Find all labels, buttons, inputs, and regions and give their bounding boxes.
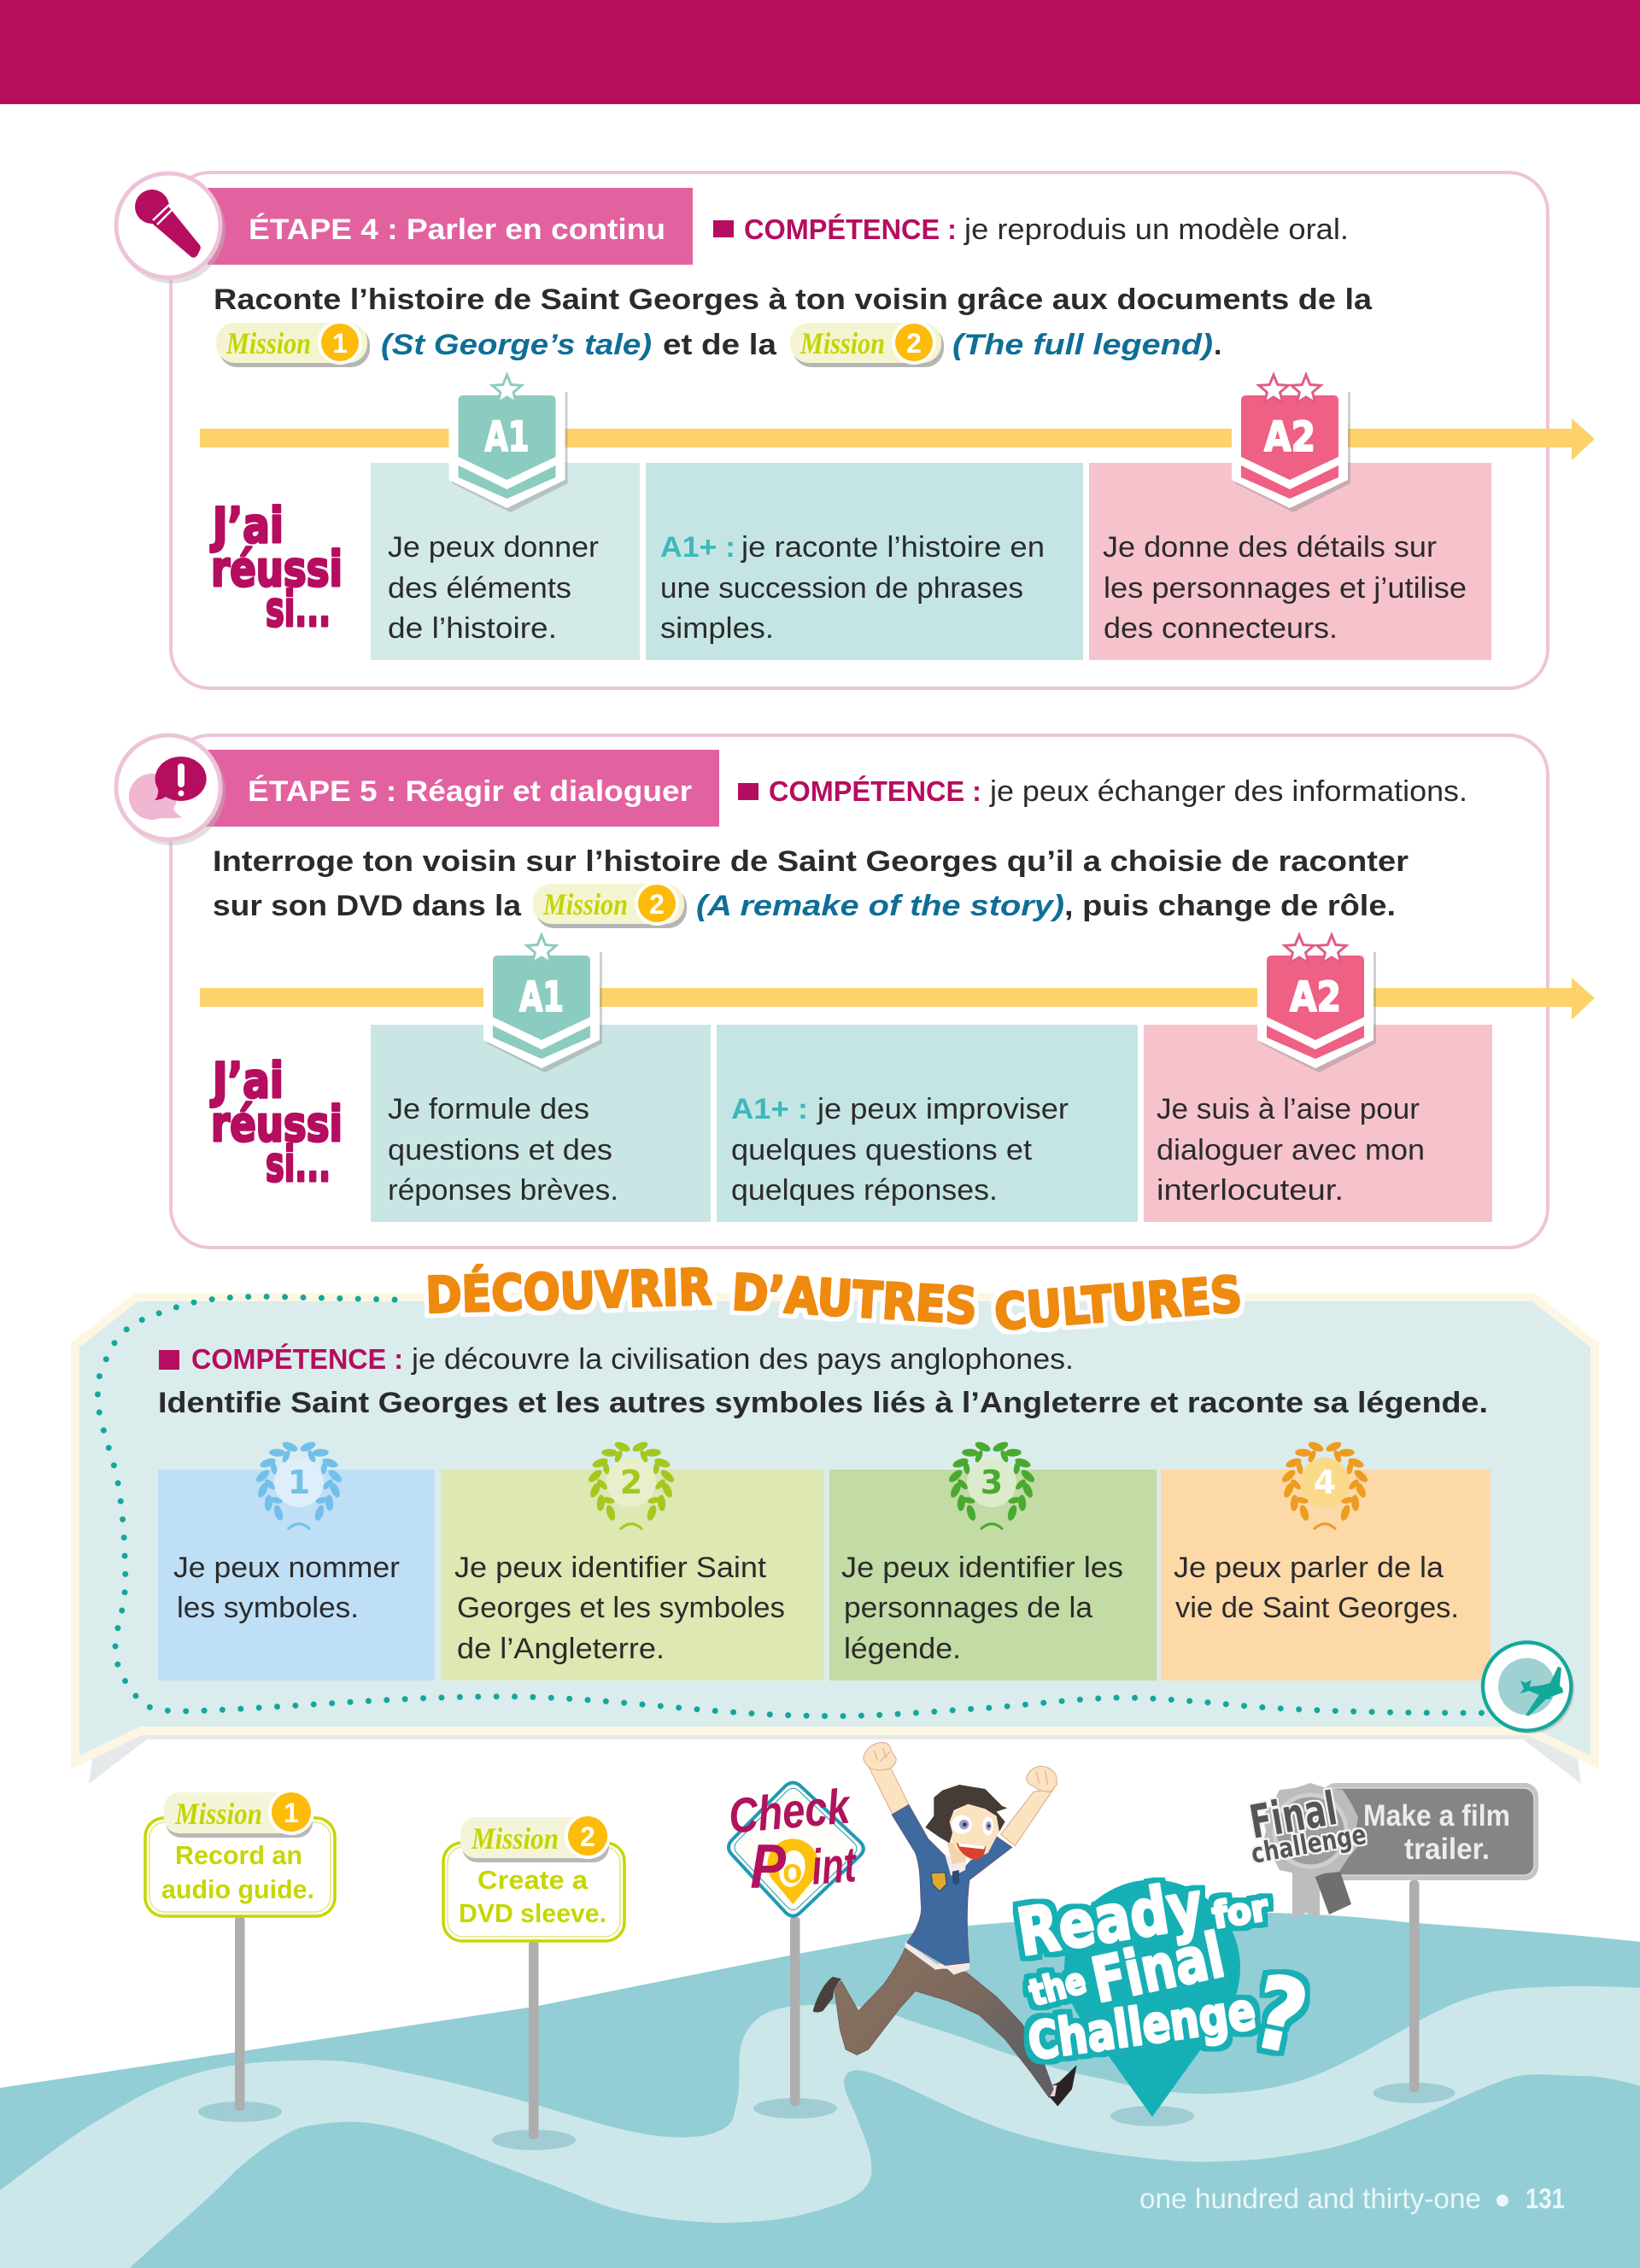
box A1+: je peux improviser — [817, 1093, 1069, 1125]
header band — [0, 0, 1640, 104]
box A2: les personnages et j’utilise — [1104, 572, 1467, 605]
box A1 — [371, 1025, 711, 1222]
box level 3: légende. — [844, 1633, 961, 1665]
instruction text: (A remake of the story) — [696, 890, 1064, 922]
box level 1 — [158, 1470, 435, 1681]
sign: check point: P — [750, 1832, 786, 1902]
mission pill 2 — [790, 320, 944, 367]
title: DÉCOUVRIR — [425, 1257, 712, 1324]
callout text: the — [1025, 1959, 1090, 2014]
callout text: for — [1210, 1886, 1271, 1937]
character: jumping student — [813, 1743, 1077, 2107]
box A1+ — [717, 1025, 1138, 1222]
title: D’AUTRES — [730, 1263, 979, 1336]
trousers — [835, 1947, 1053, 2098]
box level 3 — [829, 1470, 1157, 1681]
heading bar: étape 4 — [208, 188, 693, 265]
post — [753, 1917, 837, 2119]
mission tab — [164, 1789, 314, 1838]
callout text: Ready — [1012, 1867, 1208, 1971]
rosette — [1245, 1781, 1368, 1879]
j'ai réussi si: si... — [266, 1137, 331, 1193]
sign: check point: Check — [727, 1779, 854, 1844]
box level 2: Je peux identifier Saint — [454, 1552, 767, 1584]
arrow: progress — [200, 418, 1595, 460]
instruction text — [214, 284, 1373, 367]
sign: check point: o — [782, 1852, 802, 1890]
box A1+: A1+ : — [731, 1093, 808, 1125]
head — [925, 1785, 1007, 1864]
laurel 2: 2 — [620, 1464, 642, 1501]
box A1: des éléments — [388, 572, 571, 605]
box A1: Je formule des — [388, 1093, 589, 1125]
j'ai réussi si — [210, 498, 343, 638]
panel: étape 4 — [116, 172, 1595, 688]
box level 3: Je peux identifier les — [841, 1552, 1123, 1584]
badge A2 — [1257, 935, 1376, 1073]
mission pill 1: 1 — [332, 328, 348, 359]
instruction text: Identifie Saint Georges et les autres symboles liés à l’Angleterre et raconte sa légende. — [158, 1387, 1488, 1419]
mission tab: 1 — [284, 1797, 299, 1828]
instruction text: Raconte l’histoire de Saint Georges à ton voisin grâce aux documents de la — [214, 284, 1373, 316]
pin: ready for the final challenge — [1012, 1867, 1316, 2126]
badge A1: A1 — [485, 413, 530, 461]
box A1+ — [646, 463, 1083, 660]
box level 1: les symboles. — [177, 1592, 359, 1624]
competence line: COMPÉTENCE : — [744, 213, 957, 245]
sign: mission 2: Create a — [477, 1865, 589, 1895]
badge A1 — [449, 375, 567, 512]
box A2: dialoguer avec mon — [1157, 1134, 1425, 1166]
box level 4 — [1161, 1470, 1491, 1681]
j'ai réussi si — [210, 1053, 343, 1193]
shoes — [813, 1977, 1077, 2107]
competence line — [713, 213, 1349, 246]
instruction text: (The full legend) — [952, 329, 1213, 361]
callout text: ? — [1244, 1954, 1316, 2077]
box A2 — [1144, 1025, 1492, 1222]
sign: mission 1 — [145, 1789, 335, 2122]
j'ai réussi si: réussi — [211, 541, 343, 598]
box level 2 — [441, 1470, 823, 1681]
box level 3: personnages de la — [844, 1592, 1092, 1624]
box A2: Je suis à l’aise pour — [1157, 1093, 1420, 1125]
instruction text: sur son DVD dans la — [213, 890, 522, 922]
sign: final challenge: Make a film — [1363, 1799, 1510, 1833]
instruction text: , puis change de rôle. — [1064, 890, 1396, 922]
page number: one hundred and thirty-one — [1139, 2183, 1481, 2214]
badge A1: A1 — [519, 973, 564, 1021]
instruction text: . — [1214, 329, 1221, 361]
box A1+: simples. — [660, 612, 774, 645]
sign: check point — [727, 1779, 864, 2119]
panel: étape 5 — [116, 735, 1595, 1248]
badge A2: A2 — [1290, 973, 1341, 1021]
box A1+: quelques questions et — [731, 1134, 1033, 1166]
box level 4: Je peux parler de la — [1174, 1552, 1444, 1584]
laurel 4 — [1280, 1440, 1369, 1529]
pullover — [892, 1804, 1012, 1966]
box A2: interlocuteur. — [1157, 1174, 1344, 1207]
box A1+: une succession de phrases — [660, 572, 1023, 605]
arrow: progress — [200, 978, 1595, 1020]
badge A1 — [483, 935, 602, 1073]
j'ai réussi si: réussi — [211, 1096, 343, 1153]
dotted trail — [97, 1296, 1486, 1716]
laurel 4: 4 — [1314, 1464, 1336, 1501]
sign: final challenge — [1245, 1781, 1538, 2103]
banner shadow — [89, 1733, 1581, 1784]
banner — [75, 1297, 1595, 1762]
heading bar: étape 4: ÉTAPE 4 : Parler en continu — [249, 213, 665, 246]
mission pill 1: Mission — [226, 326, 311, 360]
mission pill 2 — [533, 881, 687, 928]
instruction text: Interroge ton voisin sur l’histoire de Saint Georges qu’il a choisie de raconter — [213, 845, 1409, 878]
box level 1: Je peux nommer — [173, 1552, 400, 1584]
competence line: COMPÉTENCE : — [769, 775, 981, 807]
competence line: je reproduis un modèle oral. — [964, 213, 1349, 246]
collar and tie — [946, 1856, 967, 1885]
box level 2: Georges et les symboles — [457, 1592, 785, 1624]
competence line: COMPÉTENCE : — [191, 1343, 403, 1375]
laurel 3 — [947, 1440, 1036, 1529]
post — [1374, 1880, 1456, 2103]
title: CULTURES — [993, 1265, 1244, 1342]
sign: mission 1: Record an — [175, 1840, 302, 1870]
sign: final challenge: trailer. — [1404, 1833, 1490, 1866]
sign: mission 2 — [443, 1813, 624, 2150]
box A1+: quelques réponses. — [731, 1174, 998, 1207]
competence line: je découvre la civilisation des pays anglophones. — [411, 1343, 1074, 1376]
sign: mission 1: audio guide. — [161, 1874, 314, 1904]
callout text: Final — [1086, 1919, 1230, 2017]
badge A2: A2 — [1264, 413, 1315, 461]
heading bar: étape 5: ÉTAPE 5 : Réagir et dialoguer — [248, 775, 692, 808]
shirt hem — [905, 1942, 969, 1975]
callout text — [1012, 1867, 1316, 2077]
box A1: questions et des — [388, 1134, 612, 1166]
box A1: Je peux donner — [388, 531, 599, 564]
instruction text: (St George’s tale) — [381, 329, 652, 361]
heading bar: étape 5 — [205, 750, 719, 827]
box A1+: je raconte l’histoire en — [741, 531, 1045, 564]
mission pill 2: 2 — [906, 328, 922, 359]
landscape: hill and road — [0, 1913, 1640, 2268]
mission tab: Mission — [174, 1797, 262, 1831]
j'ai réussi si: si... — [266, 582, 331, 638]
competence line — [159, 1343, 1074, 1376]
mission pill 2: 2 — [649, 889, 665, 920]
mission tab: 2 — [580, 1821, 595, 1852]
callout text: Challenge — [1024, 1981, 1259, 2072]
title — [425, 1257, 1244, 1342]
sign: check point: int — [810, 1837, 859, 1896]
laurel 1 — [255, 1440, 343, 1529]
box level 4: vie de Saint Georges. — [1175, 1592, 1459, 1624]
box A1+: A1+ : — [660, 531, 735, 564]
post — [492, 1941, 576, 2150]
mission tab — [460, 1813, 611, 1862]
box level 2: de l’Angleterre. — [457, 1633, 665, 1665]
box A1: de l’histoire. — [388, 612, 557, 645]
box A1 — [371, 463, 640, 660]
rosette: challenge — [1249, 1818, 1368, 1870]
arms — [864, 1743, 1057, 1846]
sign: mission 2: DVD sleeve. — [459, 1898, 606, 1928]
j'ai réussi si: J’ai — [210, 1053, 284, 1109]
rosette: Final — [1245, 1781, 1341, 1850]
instruction text: et de la — [663, 329, 777, 361]
mission pill 2: Mission — [800, 326, 885, 360]
panel: découvrir d'autres cultures — [75, 1257, 1595, 1784]
laurel 1: 1 — [288, 1464, 310, 1501]
mission pill 2: Mission — [542, 887, 628, 921]
mission tab: Mission — [471, 1821, 559, 1856]
icon: plane — [1483, 1642, 1574, 1733]
instruction text — [213, 845, 1409, 928]
j'ai réussi si: J’ai — [210, 498, 284, 554]
page number: 131 — [1526, 2183, 1565, 2214]
competence line: je peux échanger des informations. — [989, 775, 1467, 808]
box A2: Je donne des détails sur — [1103, 531, 1437, 564]
badge A2 — [1232, 375, 1350, 512]
competence line — [738, 775, 1467, 808]
laurel 2 — [587, 1440, 676, 1529]
rosette ribbons — [1292, 1862, 1351, 1919]
icon: microphone — [116, 173, 226, 284]
laurel 3: 3 — [981, 1464, 1003, 1501]
box A2 — [1089, 463, 1491, 660]
post — [198, 1916, 282, 2122]
mission pill 1 — [216, 320, 370, 367]
icon: speech bubbles — [116, 735, 226, 845]
crest — [931, 1873, 946, 1891]
box A1: réponses brèves. — [388, 1174, 618, 1207]
box A2: des connecteurs. — [1104, 612, 1338, 645]
